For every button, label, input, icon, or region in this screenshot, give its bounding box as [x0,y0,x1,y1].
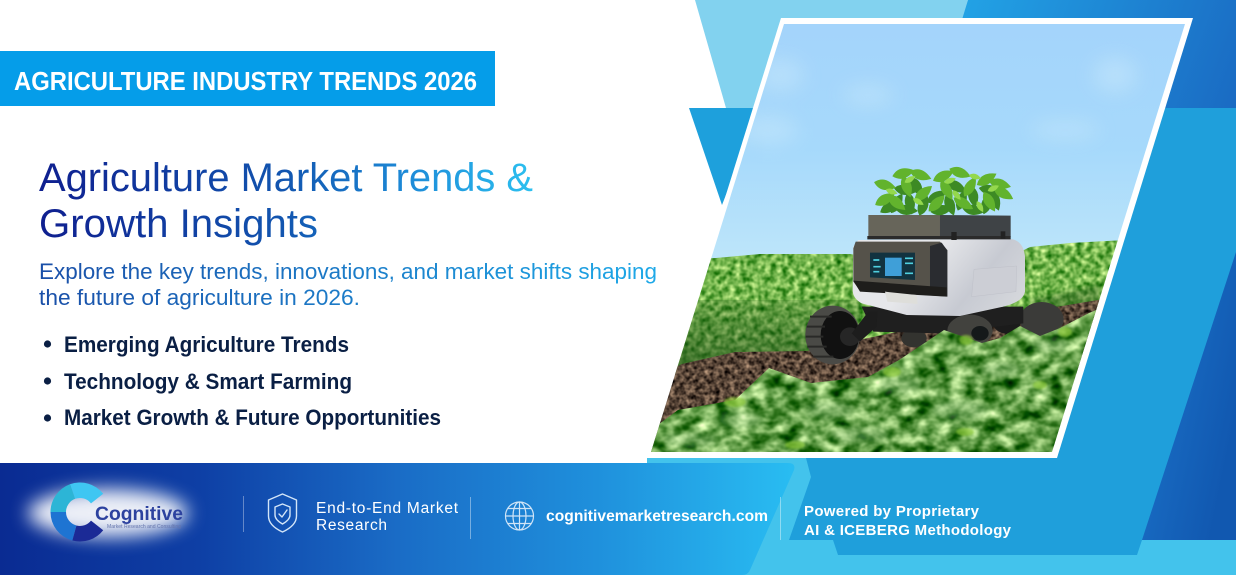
footer text: end-to-end [316,500,459,534]
footer text: end-to-end: End-to-End Market [316,500,459,517]
robot rear wheels [1020,302,1064,337]
robot mid wheel [947,314,992,343]
logo: Cognitive [28,483,188,541]
robot planter tray [868,215,940,237]
photo frame [644,18,1193,458]
subheading [39,259,657,310]
footer text: methodology [804,503,1012,539]
bullet list: Technology & Smart Farming [64,369,352,394]
subheading: the future of agriculture in 2026. [39,285,360,310]
logo: Cognitive: Market Research and Consulting [107,524,181,530]
robot white body [853,239,1025,316]
main heading [39,156,533,246]
photo foreground foliage [651,310,1096,452]
photo clouds [738,57,1137,144]
footer text: methodology: Powered by Proprietary [804,503,980,520]
robot front wheel [805,306,860,364]
icon: shield [268,494,296,532]
photo sky [706,24,1185,274]
bullet list: Market Growth & Future Opportunities [64,405,441,430]
background: light blue lower band [0,458,1236,575]
background: light blue top shape [695,0,968,108]
photo: agricultural robot in a green field [640,24,1200,460]
robot plants [874,166,1014,216]
robot chassis [862,307,1023,333]
mid green leaves [874,166,1014,212]
bullet list [44,332,441,430]
banner text: AGRICULTURE INDUSTRY TRENDS 2026 [14,68,477,96]
robot screen [870,253,915,280]
footer text: end-to-end: Research [316,517,387,534]
background: blue triangle accent [689,108,760,205]
dark leaves [880,178,1000,216]
photo foreground highlights [664,338,1068,447]
logo: Cognitive: Cognitive [95,504,183,525]
robot dark front panel [853,242,947,297]
light leaves [885,172,1000,213]
footer text: website: cognitivemarketresearch.com [546,508,768,525]
footer text: methodology: AI & ICEBERG Methodology [804,522,1012,539]
robot [805,164,1064,364]
robot latch [885,292,918,304]
bullet list: Emerging Agriculture Trends [64,332,349,357]
divider [243,496,244,532]
photo dark crop shadow [675,300,860,374]
background: dark blue lower right wedge [1142,252,1236,540]
divider [470,497,471,539]
top banner [0,51,495,106]
photo back hedge and left field [675,240,1118,374]
background: top right dark blue shape [935,0,1236,108]
background: large blue right shape [789,108,1236,555]
main heading: Agriculture Market Trends & [39,156,533,200]
footer band [0,463,794,575]
photo foreground bright leaves [724,327,1072,449]
photo soil path [640,298,1110,452]
subheading: Explore the key trends, innovations, and market shifts shaping [39,259,657,284]
main heading: Growth Insights [39,202,318,246]
icon: globe [506,502,534,530]
robot side hatch [972,266,1017,297]
photo right hedge shadow [1030,285,1100,320]
divider [780,497,781,540]
